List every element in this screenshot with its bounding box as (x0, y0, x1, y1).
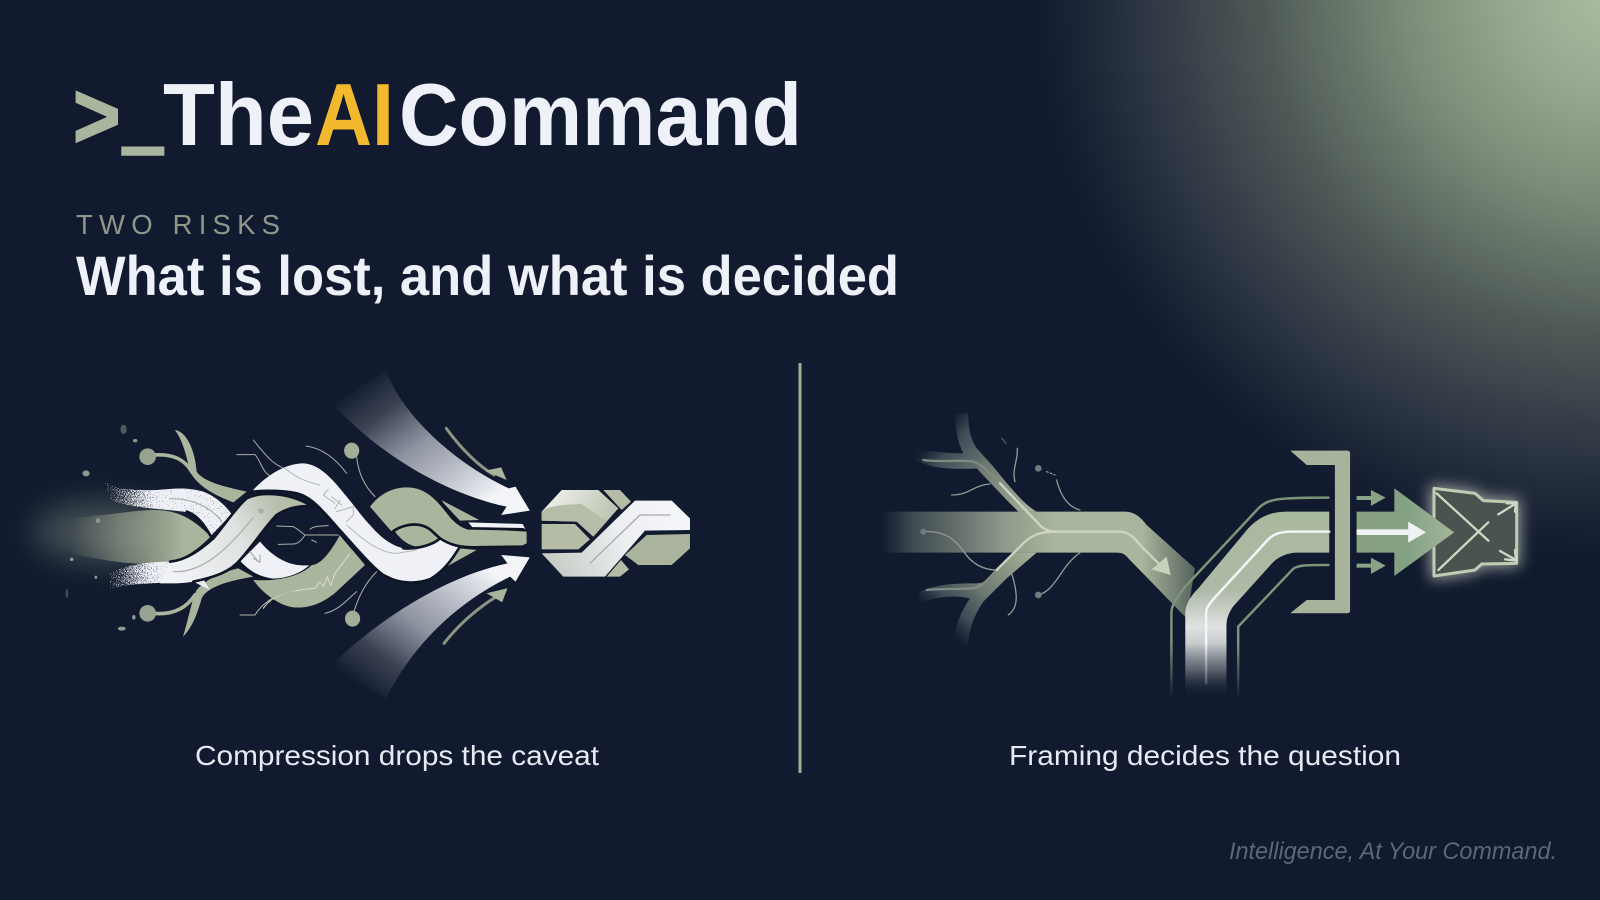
small sage arrow top (446, 428, 507, 480)
ribbon circuit lines (285, 468, 417, 553)
band highlight lines (923, 460, 1160, 590)
chip lower right block (625, 534, 690, 565)
chip upper right block (603, 490, 631, 510)
output arrow (1357, 488, 1454, 576)
chip upper left block (542, 490, 618, 537)
lower sage stem (183, 568, 253, 637)
sage core (70, 510, 211, 564)
tendril nodes (920, 465, 1042, 598)
logo wordmark (163, 65, 802, 164)
large white arrow bottom (328, 555, 530, 698)
target box (1434, 488, 1517, 576)
thin tendrils (923, 438, 1080, 615)
caption: compression: Compression drops the caveat (195, 740, 599, 771)
logo (73, 0, 802, 178)
bracket (1290, 451, 1350, 613)
pipe highlight (1206, 532, 1329, 683)
outer nodes and specks (66, 370, 530, 698)
chip white strand (542, 501, 690, 577)
eyebrow: two risks: TWO RISKS (76, 209, 280, 240)
upper branches (913, 413, 1037, 512)
lower branches (918, 553, 1037, 645)
upper left strand (105, 482, 232, 535)
small arrow bottom (1357, 558, 1386, 574)
logo prompt symbol (73, 0, 165, 178)
right braid section (240, 457, 527, 615)
logo wordmark: Command (399, 65, 802, 164)
chip middle left block (542, 524, 590, 549)
redirecting pipe (1185, 512, 1329, 697)
ribbon outlines (252, 491, 525, 583)
large white arrow top (332, 370, 530, 515)
illustration: framing (883, 413, 1520, 700)
upper circuit lines (237, 440, 347, 485)
node connectors (153, 455, 195, 614)
upper sage stem (175, 430, 247, 502)
target halo (1430, 485, 1520, 580)
target lines (1437, 493, 1516, 570)
caption: framing: Framing decides the question (1009, 740, 1401, 771)
white sliver (468, 522, 525, 529)
heading: What is lost, and what is decided (76, 245, 899, 307)
logo wordmark: AI (315, 65, 394, 164)
nodes (139, 448, 156, 622)
lobe circuit lines (263, 553, 350, 608)
glowing target frame (1430, 485, 1520, 580)
braid outlines (170, 494, 312, 582)
upper sage lobe (370, 487, 527, 547)
lower wedge (442, 548, 477, 569)
logo wordmark: The (163, 65, 314, 164)
divider (798, 363, 802, 773)
output arrow core (1357, 522, 1426, 543)
inner eye (395, 525, 440, 547)
band arrow head (1152, 557, 1171, 575)
upper wedge (440, 499, 479, 521)
illustration: compression (33, 370, 690, 698)
logo prompt symbol: > (73, 65, 121, 168)
lower left strand (110, 562, 210, 590)
left braid section (70, 430, 347, 637)
main framing band (883, 512, 1195, 618)
outer lower wires (240, 457, 377, 615)
small arrow top (1357, 490, 1386, 506)
left branching band (883, 413, 1195, 645)
lower sage lobe (253, 535, 365, 608)
chip center line (590, 515, 670, 563)
hole circuit lines (277, 526, 338, 544)
pipe outer lines (1171, 498, 1328, 697)
emerging strand (240, 542, 311, 579)
pipe fade (1164, 643, 1246, 700)
small sage arrow bottom (444, 588, 507, 643)
tagline: Intelligence, At Your Command. (1229, 838, 1557, 865)
smoke fade (33, 502, 177, 562)
rising strand (160, 495, 312, 583)
main ribbon (252, 463, 458, 582)
strand detail lines (169, 499, 264, 572)
chip lower small block (607, 560, 629, 577)
background glow (1000, 0, 1600, 600)
compressed chip (542, 490, 690, 577)
